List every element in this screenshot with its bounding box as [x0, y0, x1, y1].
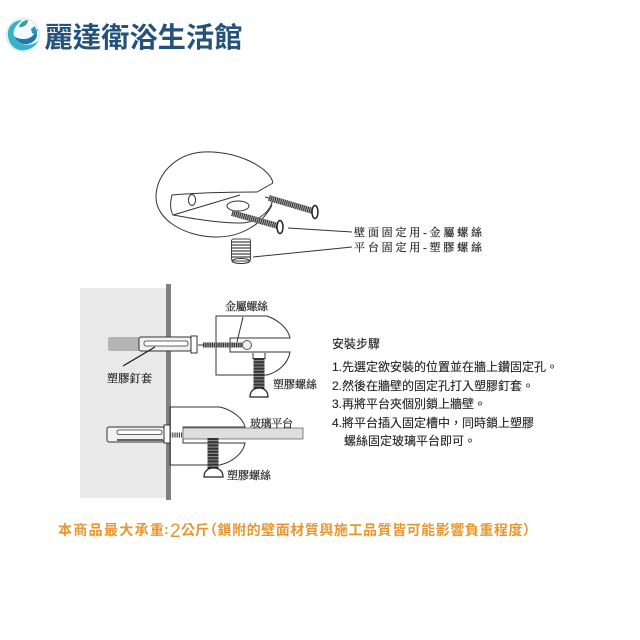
lower metal screw [170, 432, 182, 438]
step 3: 3.再將平台夾個別鎖上牆壁。 [332, 396, 486, 411]
max load note [58, 521, 537, 542]
steps heading: 安裝步驟 [332, 336, 380, 351]
label: plastic screw lower: 塑膠螺絲 [227, 468, 272, 482]
installation steps [332, 336, 558, 448]
load label: 本商品最大承重 [58, 522, 164, 538]
lower anchor [107, 425, 170, 443]
label: metal screw: 壁面固定用-金屬螺絲 [354, 225, 483, 239]
step 2: 2.然後在牆壁的固定孔打入塑膠釘套。 [332, 378, 534, 393]
bracket slot [171, 183, 273, 223]
load colon: : [164, 521, 169, 537]
load unit: 公斤 [181, 522, 209, 538]
step 4 continued: 螺絲固定玻璃平台即可。 [344, 433, 476, 448]
leader: metal screw [237, 317, 243, 342]
label: anchor: 塑膠釘套 [107, 371, 152, 385]
label: metal screw: 金屬螺絲 [225, 299, 269, 313]
metal screw upper [265, 197, 318, 218]
upper plastic screw [250, 353, 268, 397]
load value: 2 [170, 521, 181, 542]
label: plastic screw upper: 塑膠螺絲 [273, 377, 318, 391]
diagram: wall installation [80, 284, 318, 500]
label: glass platform: 玻璃平台 [250, 416, 293, 430]
wall [80, 288, 167, 498]
icon: water swirl logo [6, 18, 40, 52]
diagram: bracket exploded view [156, 152, 483, 264]
plastic screw cylinder [232, 239, 250, 264]
lower plastic screw [204, 438, 223, 477]
leader line to plastic screw [253, 247, 352, 257]
upper clamp [216, 316, 290, 375]
wall edge [166, 284, 171, 500]
label: plastic screw: 平台固定用-塑膠螺絲 [354, 240, 483, 254]
upper anchor [108, 336, 197, 353]
bracket dome body [156, 152, 273, 237]
upper metal screw [198, 340, 252, 350]
lower clamp [170, 407, 245, 465]
logo [6, 18, 243, 53]
logo wordmark: 麗達衛浴生活館 [44, 22, 243, 53]
step 1: 1.先選定欲安裝的位置並在牆上鑽固定孔。 [332, 359, 558, 374]
mounting hole [227, 201, 249, 211]
step 4: 4.將平台插入固定槽中，同時鎖上塑膠 [332, 415, 534, 430]
metal screw lower [232, 213, 283, 234]
leader: anchor [123, 347, 155, 366]
leader line to metal screw [288, 228, 352, 232]
glass platform [183, 428, 303, 439]
load disclaimer: （鎖附的壁面材質與施工品質皆可能影響負重程度） [203, 522, 537, 538]
